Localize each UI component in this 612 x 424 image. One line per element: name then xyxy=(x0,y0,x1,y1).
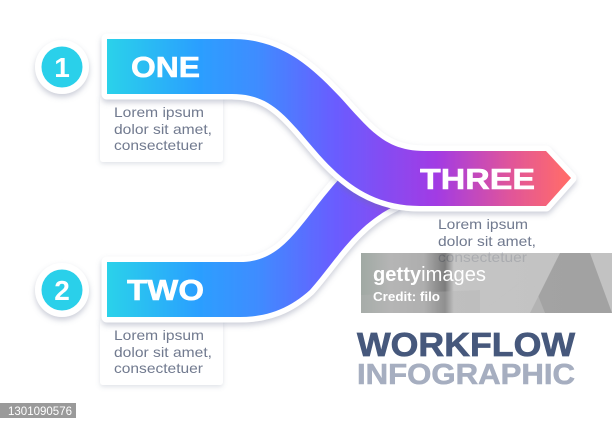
badge numeral 1: 1 xyxy=(54,52,70,83)
badge: number 2 xyxy=(35,263,89,317)
caption text: step two: consectetuer xyxy=(114,360,203,376)
ribbon: step two xyxy=(107,178,395,317)
caption text: step two: Lorem ipsum xyxy=(114,327,204,343)
badge numeral 2: 2 xyxy=(54,275,70,306)
title: WORKFLOW: WORKFLOW xyxy=(357,326,576,363)
watermark credit: Credit: filo xyxy=(373,290,440,304)
watermark logo text: gettyimages xyxy=(373,264,486,286)
caption card: step two xyxy=(100,319,223,385)
label: TWO: TWO xyxy=(127,275,204,307)
watermark panel xyxy=(361,253,612,313)
caption text: step three: dolor sit amet, xyxy=(438,233,536,249)
caption text: step three: Lorem ipsum xyxy=(438,216,528,232)
label: THREE: THREE xyxy=(420,164,535,196)
label: ONE: ONE xyxy=(131,52,200,84)
caption text: step one: Lorem ipsum xyxy=(114,104,204,120)
image id number: 1301090576 xyxy=(8,406,72,418)
image id tag xyxy=(0,403,76,418)
ribbon: step one into three xyxy=(107,39,571,206)
caption text: step two: dolor sit amet, xyxy=(114,344,212,360)
caption text: step three: consectetuer xyxy=(438,249,527,265)
caption text: step one: consectetuer xyxy=(114,137,203,153)
caption card: step one xyxy=(100,96,223,162)
subtitle: INFOGRAPHIC: INFOGRAPHIC xyxy=(357,359,575,391)
badge: number 1 xyxy=(35,40,89,94)
caption text: step one: dolor sit amet, xyxy=(114,121,212,137)
